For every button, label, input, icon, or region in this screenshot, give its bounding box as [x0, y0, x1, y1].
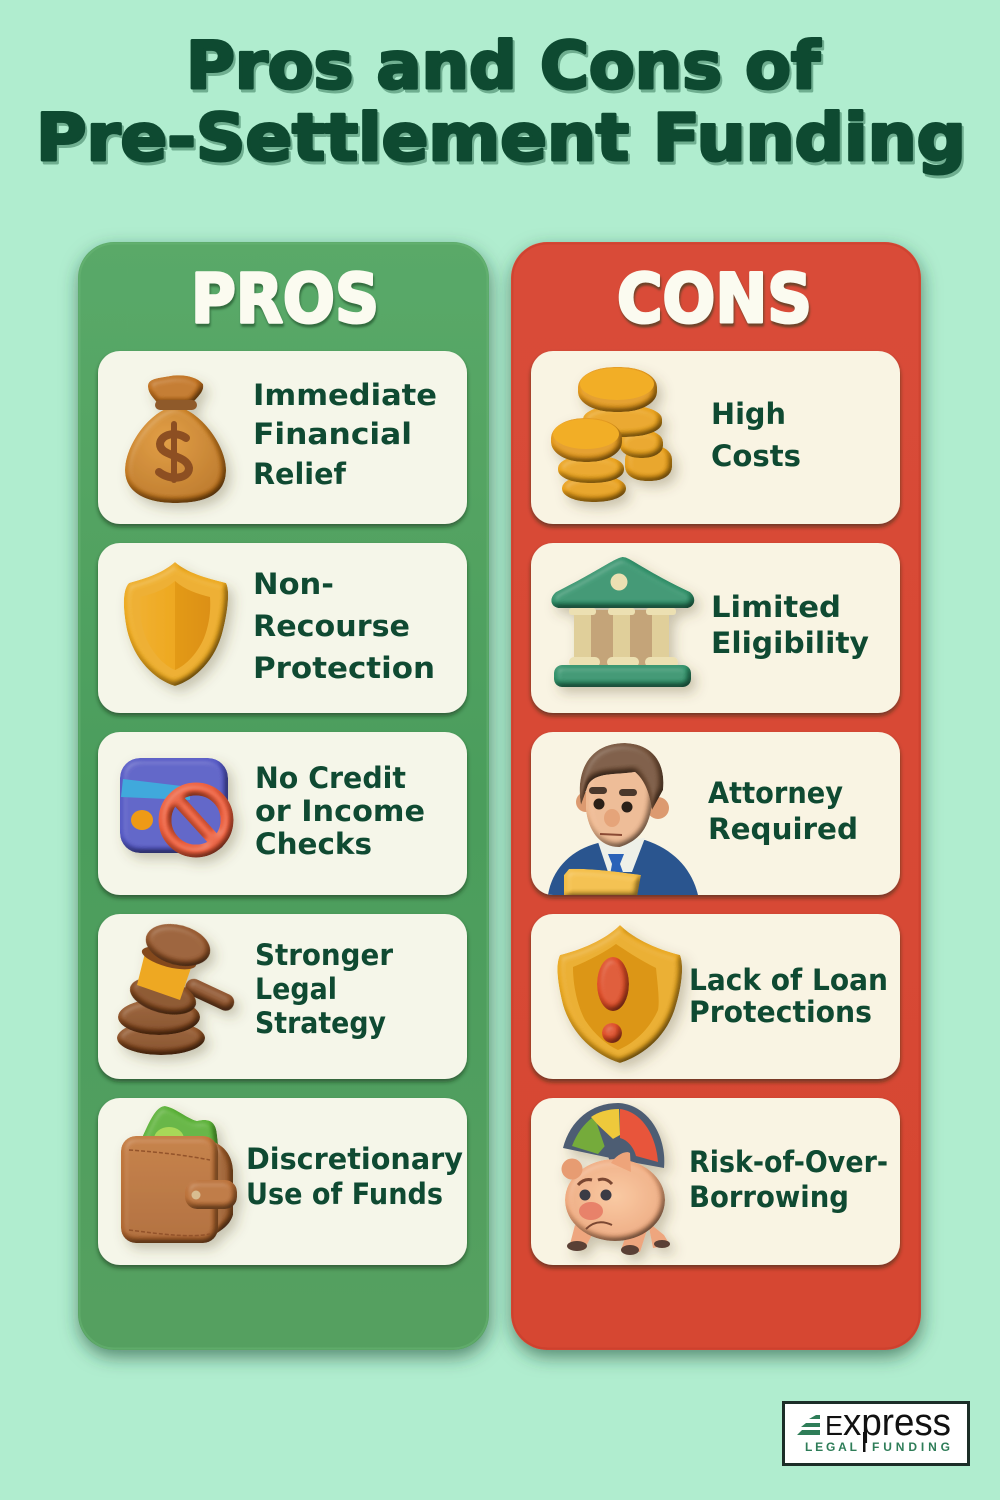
- card: risk of over-borrowing: [531, 1098, 900, 1265]
- label: Protection: [253, 651, 435, 685]
- label: Discretionary: [246, 1142, 463, 1176]
- label: [711, 590, 869, 660]
- label: Immediate: [253, 378, 437, 412]
- label: Costs: [711, 439, 801, 473]
- tagline: [805, 1432, 950, 1454]
- title: Pre-Settlement Funding: [36, 101, 966, 176]
- label: [711, 397, 801, 473]
- card: high costs: [531, 351, 900, 524]
- label: Lack of Loan: [689, 963, 888, 997]
- title: Pros and Cons of: [186, 29, 821, 104]
- icon: credit card with prohibition sign: [120, 758, 228, 853]
- icon: speed lines: [797, 1415, 820, 1435]
- label: [708, 776, 858, 846]
- label: Strategy: [255, 1006, 386, 1040]
- label: Risk-of-Over-: [689, 1145, 888, 1179]
- label: Attorney: [708, 776, 843, 810]
- label: [689, 1145, 888, 1214]
- panel: pros: [78, 242, 489, 1350]
- icon: gold shield: [124, 562, 228, 686]
- card: lack of loan protections: [531, 914, 900, 1079]
- label: Use of Funds: [246, 1177, 443, 1211]
- wordmark: Express: [825, 1402, 951, 1444]
- heading: cons: CONS: [617, 260, 812, 339]
- panel: cons: [511, 242, 921, 1350]
- icon: worried attorney: [548, 743, 698, 897]
- label: Financial: [253, 417, 412, 451]
- card: discretionary use of funds: [98, 1098, 467, 1265]
- tagline: FUNDING: [872, 1440, 950, 1454]
- card: stronger legal strategy: [98, 914, 467, 1079]
- label: Legal: [255, 972, 337, 1006]
- icon: gavel: [117, 917, 237, 1055]
- label: Required: [708, 812, 858, 846]
- icon: wallet: [121, 1106, 237, 1243]
- label: Borrowing: [689, 1180, 849, 1214]
- label: Stronger: [255, 938, 394, 972]
- card: limited eligibility: [531, 543, 900, 713]
- label: Non-: [253, 567, 334, 601]
- label: Recourse: [253, 609, 410, 643]
- label: Relief: [253, 457, 346, 491]
- label: [255, 938, 394, 1040]
- label: [253, 378, 437, 491]
- label: Checks: [255, 827, 372, 861]
- label: Limited: [711, 590, 841, 624]
- label: [689, 963, 888, 1029]
- label: No Credit: [255, 761, 406, 795]
- label: Eligibility: [711, 626, 869, 660]
- card: non-recourse protection: [98, 543, 467, 713]
- label: High: [711, 397, 786, 431]
- icon: coin stacks: [551, 367, 672, 502]
- icon: piggy bank and gauge: [562, 1103, 670, 1255]
- icon: warning shield: [557, 925, 682, 1063]
- tagline: LEGAL: [805, 1440, 857, 1454]
- card: immediate financial relief: [98, 351, 467, 524]
- label: [253, 567, 435, 685]
- heading: pros: PROS: [191, 260, 379, 339]
- label: [246, 1142, 463, 1211]
- card: attorney required: [531, 732, 900, 897]
- card: no credit or income checks: [98, 732, 467, 895]
- logo: Express Legal Funding: [784, 1402, 968, 1464]
- title: [36, 29, 966, 176]
- label: or Income: [255, 794, 425, 828]
- label: [255, 761, 425, 861]
- label: Protections: [689, 995, 872, 1029]
- icon: money bag: [125, 375, 226, 503]
- icon: courthouse: [551, 557, 694, 687]
